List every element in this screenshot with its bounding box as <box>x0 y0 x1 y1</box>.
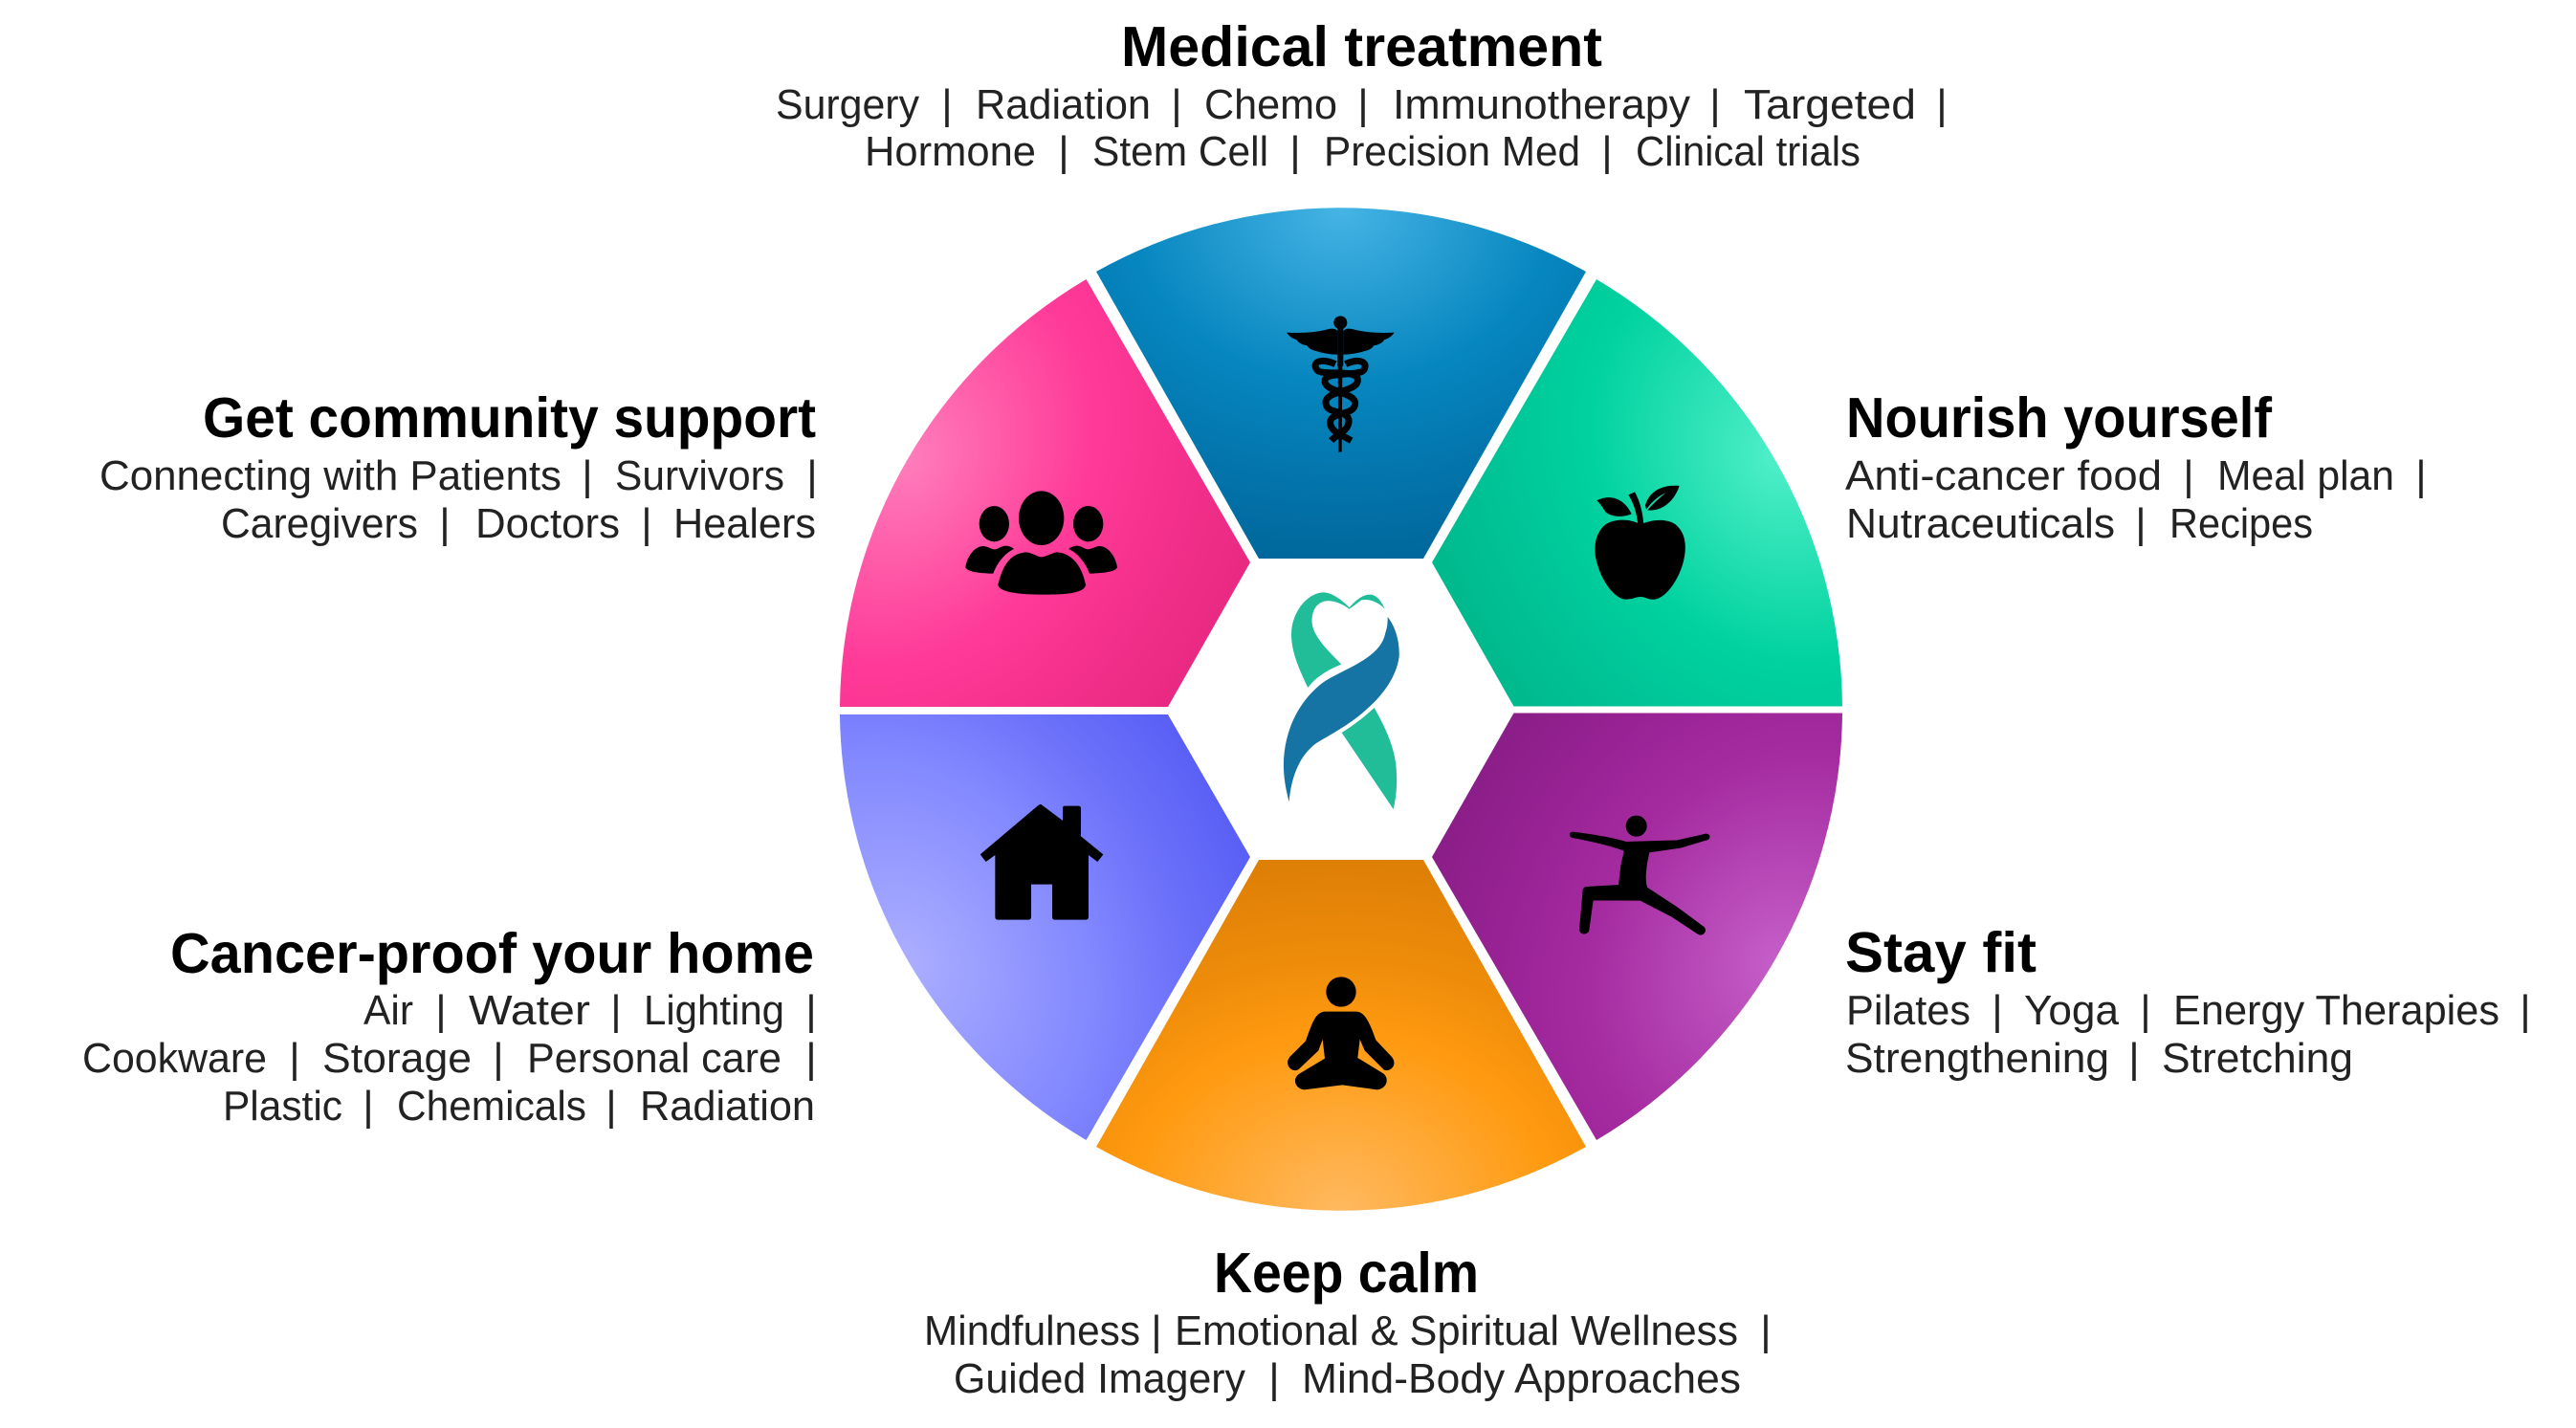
text: community support line 1: Connecting with Patients <box>99 452 561 499</box>
text: home line 2: Personal care <box>527 1035 782 1082</box>
panel: cancer-proof home segment <box>840 714 1250 1140</box>
text: stay fit line 2: Strengthening <box>1845 1035 2109 1082</box>
panel: keep calm segment <box>1096 860 1586 1211</box>
text: community support line 2: Healers <box>673 500 816 547</box>
text: medical treatment line 2: Clinical trials <box>1636 128 1860 175</box>
heading: medical treatment: Medical treatment <box>1121 15 1602 78</box>
text: keep calm line 2: Mind-Body Approaches <box>1302 1355 1741 1402</box>
text: community support line 2 <box>221 500 816 547</box>
text: community support line 2: | <box>641 500 652 547</box>
text: home line 1: | <box>610 987 622 1034</box>
panel: nourish yourself segment <box>1432 279 1842 706</box>
icon: yoga pose <box>1570 816 1709 934</box>
text: medical treatment line 1: Immunotherapy <box>1393 81 1690 128</box>
text: keep calm line 1: Emotional & Spiritual Wellness <box>1175 1307 1738 1354</box>
text block: community support <box>99 386 818 547</box>
text: home line 3: Chemicals <box>397 1083 586 1130</box>
text: medical treatment line 1: | <box>1357 81 1369 128</box>
text: stay fit line 1: | <box>2140 987 2151 1034</box>
text: home line 3: | <box>605 1083 617 1130</box>
text: nourish line 1: | <box>2415 452 2427 499</box>
text: home line 1: | <box>805 987 817 1034</box>
text: keep calm line 2: | <box>1268 1355 1280 1402</box>
text: nourish line 2: Nutraceuticals <box>1846 500 2115 547</box>
text: community support line 1: | <box>806 452 818 499</box>
heading: cancer-proof your home: Cancer-proof your home <box>170 922 814 985</box>
text: medical treatment line 1: Surgery <box>776 81 919 128</box>
text: nourish line 1: Anti-cancer food <box>1845 452 2162 499</box>
heading: stay fit: Stay fit <box>1845 921 2037 984</box>
text: community support line 2: Doctors <box>475 500 620 547</box>
text: home line 1: Water <box>469 987 590 1034</box>
text: home line 1 <box>363 987 817 1034</box>
text: home line 2: Storage <box>322 1035 472 1082</box>
text: medical treatment line 1 <box>776 81 1948 128</box>
text: home line 3: Radiation <box>640 1083 815 1130</box>
text: medical treatment line 2: Hormone <box>865 128 1036 175</box>
text: stay fit line 1: Pilates <box>1846 987 1971 1034</box>
text: medical treatment line 2: Stem Cell <box>1092 128 1268 175</box>
icon: caduceus <box>1287 316 1395 452</box>
panel: community support segment <box>840 279 1250 707</box>
text: medical treatment line 2: | <box>1058 128 1069 175</box>
wheel diagram <box>840 208 1842 1211</box>
heading: keep calm: Keep calm <box>1214 1241 1479 1305</box>
text: keep calm line 1: | <box>1151 1307 1162 1354</box>
heading: get community support: Get community support <box>203 386 816 450</box>
text: stay fit line 2: Stretching <box>2162 1035 2353 1082</box>
text: stay fit line 1 <box>1846 987 2531 1034</box>
icon: people group <box>965 491 1117 595</box>
text block: nourish yourself <box>1845 386 2427 547</box>
text block: medical treatment <box>776 15 1948 175</box>
text: medical treatment line 2: | <box>1289 128 1301 175</box>
text: home line 2: | <box>493 1035 504 1082</box>
text: nourish line 2 <box>1846 500 2313 547</box>
text: home line 2: | <box>805 1035 817 1082</box>
text: nourish line 2: Recipes <box>2169 500 2313 547</box>
icon: house <box>980 804 1103 920</box>
text: home line 2: Cookware <box>82 1035 267 1082</box>
text: stay fit line 1: | <box>1992 987 2003 1034</box>
icon: awareness ribbon with heart <box>1284 592 1399 809</box>
icon: meditation <box>1288 977 1394 1089</box>
text: stay fit line 2: | <box>2128 1035 2140 1082</box>
text: medical treatment line 1: | <box>1936 81 1948 128</box>
icon: apple <box>1595 486 1685 600</box>
text: keep calm line 1: Mindfulness <box>924 1307 1140 1354</box>
text: stay fit line 2 <box>1845 1035 2353 1082</box>
text: medical treatment line 2: | <box>1601 128 1613 175</box>
text: medical treatment line 2 <box>865 128 1860 175</box>
text: medical treatment line 1: | <box>941 81 953 128</box>
text: home line 2: | <box>289 1035 300 1082</box>
text: medical treatment line 1: Targeted <box>1744 81 1916 128</box>
text: nourish line 2: | <box>2135 500 2147 547</box>
heading: nourish yourself: Nourish yourself <box>1846 386 2272 450</box>
text: home line 3 <box>223 1083 815 1130</box>
text: home line 1: | <box>435 987 447 1034</box>
text: stay fit line 1: Energy Therapies <box>2173 987 2499 1034</box>
text block: keep calm <box>924 1241 1772 1402</box>
text: nourish line 1: | <box>2183 452 2194 499</box>
text: home line 2 <box>82 1035 817 1082</box>
text: nourish line 1 <box>1845 452 2427 499</box>
text: keep calm line 1 <box>924 1307 1772 1354</box>
text: community support line 2: Caregivers <box>221 500 418 547</box>
text: community support line 1: Survivors <box>615 452 784 499</box>
text: community support line 1: | <box>582 452 593 499</box>
text: community support line 1 <box>99 452 818 499</box>
text: community support line 2: | <box>439 500 451 547</box>
text block: cancer-proof home <box>82 922 817 1130</box>
text: nourish line 1: Meal plan <box>2217 452 2394 499</box>
text: keep calm line 1: | <box>1760 1307 1772 1354</box>
text: home line 3: Plastic <box>223 1083 342 1130</box>
text: home line 3: | <box>363 1083 374 1130</box>
text: medical treatment line 1: | <box>1709 81 1721 128</box>
panel: medical treatment segment <box>1096 208 1586 559</box>
text block: stay fit <box>1845 921 2531 1082</box>
text: keep calm line 2: Guided Imagery <box>954 1355 1245 1402</box>
text: keep calm line 2 <box>954 1355 1741 1402</box>
text: stay fit line 1: | <box>2520 987 2531 1034</box>
text: home line 1: Air <box>363 987 413 1034</box>
panel: stay fit segment <box>1432 714 1842 1140</box>
text: medical treatment line 1: Chemo <box>1204 81 1337 128</box>
text: medical treatment line 2: Precision Med <box>1324 128 1580 175</box>
text: stay fit line 1: Yoga <box>2024 987 2120 1034</box>
text: home line 1: Lighting <box>644 987 784 1034</box>
text: medical treatment line 1: | <box>1171 81 1182 128</box>
text: medical treatment line 1: Radiation <box>976 81 1151 128</box>
